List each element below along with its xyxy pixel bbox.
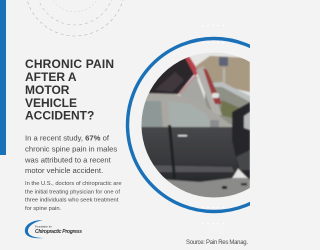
title: ACCIDENT?: [25, 108, 94, 122]
side windows: [142, 100, 163, 128]
source: Source: Pain Res Manag.: [186, 240, 248, 246]
door body: [138, 127, 240, 182]
white mirror far: [212, 93, 219, 98]
title: MOTOR: [25, 83, 70, 97]
body paragraph: motor vehicle accident.: [25, 166, 103, 175]
road sign: [219, 57, 228, 86]
debris: [222, 186, 227, 189]
photo: crashed cars: [136, 50, 250, 203]
car roof: [146, 92, 233, 128]
left blue bar: [0, 0, 6, 155]
mirror: [210, 120, 219, 127]
secondary paragraph: the initial treating physician for one of: [25, 189, 120, 195]
trees: [196, 56, 250, 92]
title: AFTER A: [25, 70, 77, 84]
door handle: [178, 135, 187, 136]
door sill: [140, 165, 234, 172]
logo: Foundation for Chiropractic Progress: Foundation for: [35, 224, 52, 228]
secondary paragraph: In the U.S., doctors of chiropractic are: [25, 181, 122, 187]
dashed concentric circles: [25, 0, 125, 36]
logo: Foundation for Chiropractic Progress: Chiropractic Progress: [35, 229, 82, 235]
title: CHRONIC PAIN: [25, 57, 114, 71]
ground: [166, 177, 250, 198]
guard rail and verge: [205, 82, 250, 125]
blue ring: [128, 38, 300, 212]
raised tailgate interior: [148, 58, 195, 95]
dark vehicle on right: [232, 102, 250, 180]
background: [0, 0, 250, 250]
white dashes near ring: [202, 25, 226, 224]
body paragraph: chronic spine pain in males: [25, 144, 117, 154]
body paragraph: In a recent study, 67% of: [25, 134, 109, 143]
secondary paragraph: for spine pain.: [25, 206, 62, 212]
title: VEHICLE: [25, 96, 77, 110]
logo: Foundation for Chiropractic Progress: [25, 220, 82, 238]
body paragraph: was attributed to a recent: [24, 155, 112, 164]
grey body of crashed car: [180, 76, 208, 107]
secondary paragraph: three individuals who seek treatment: [25, 198, 119, 204]
